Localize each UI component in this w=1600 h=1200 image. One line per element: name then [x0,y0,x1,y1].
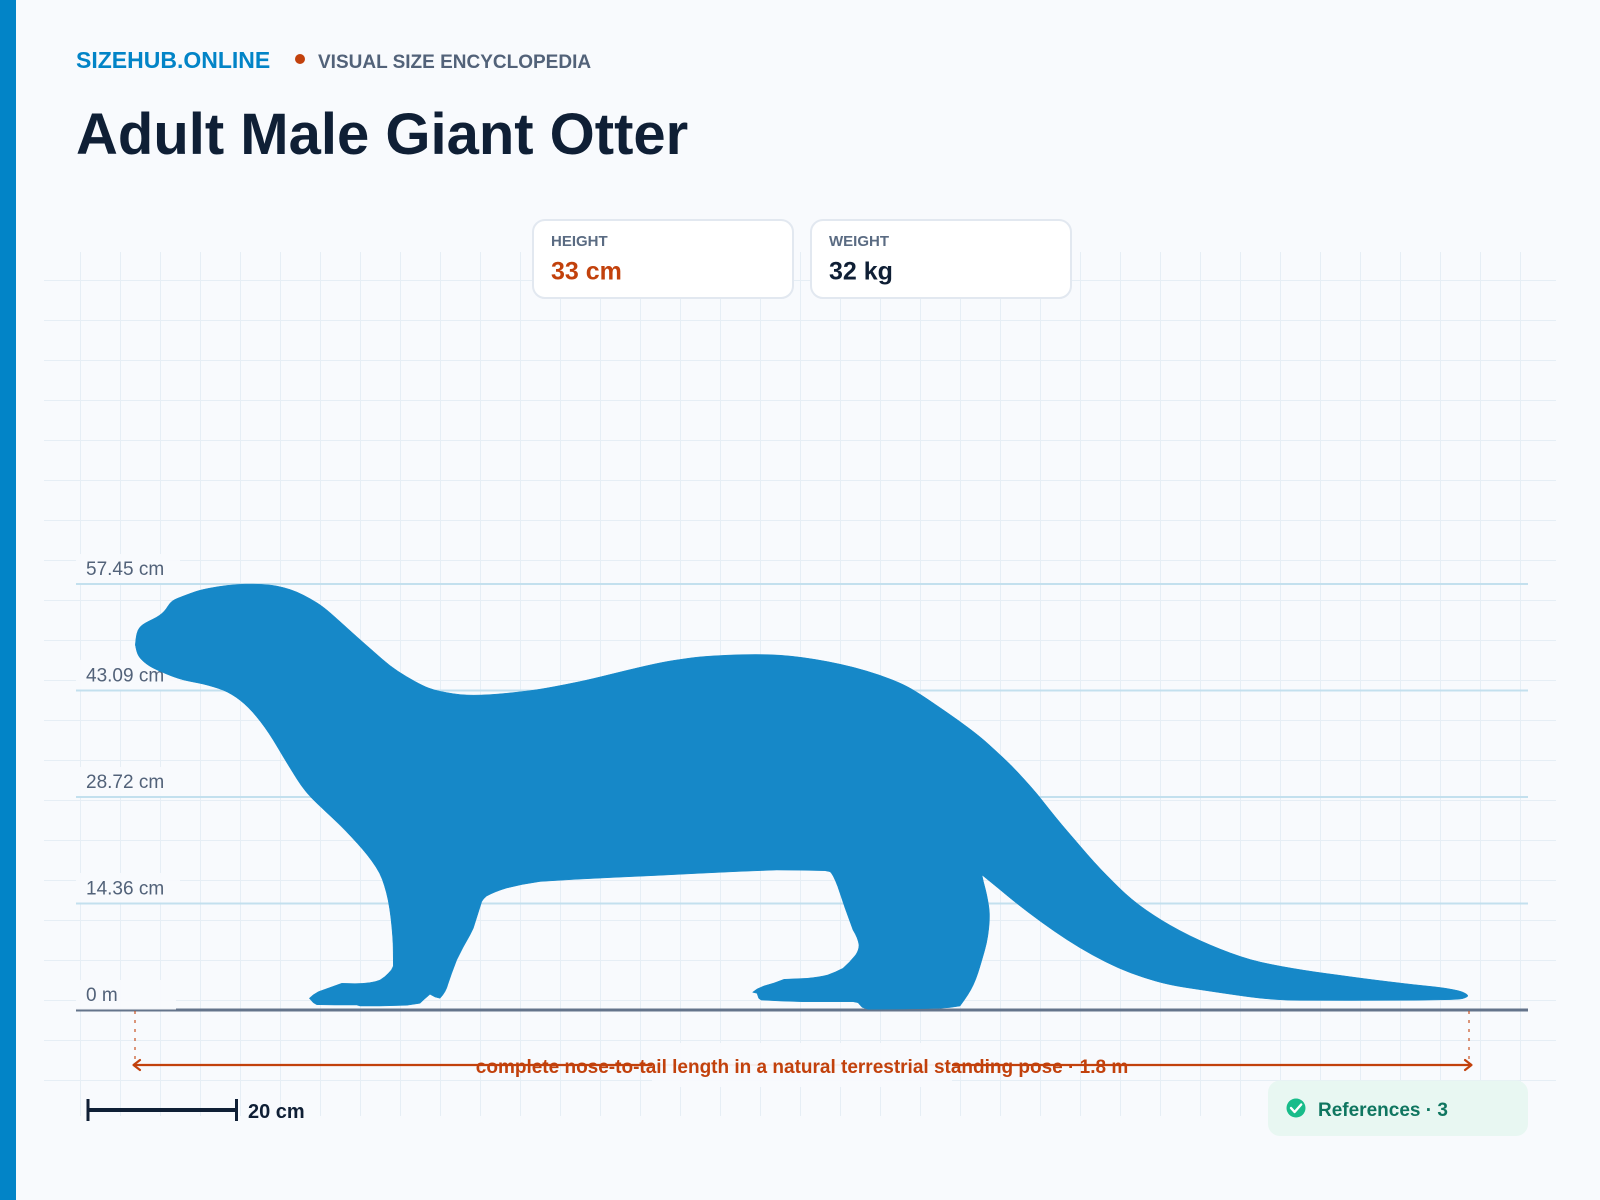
stat card: height: HEIGHT [551,233,608,250]
stat card: height [533,220,793,298]
stat card: weight: 32 kg [829,258,893,286]
scale bar: 20 cm [248,1101,305,1123]
header tagline: VISUAL SIZE ENCYCLOPEDIA [318,52,591,73]
left accent bar [0,0,16,1200]
length arrow [134,1060,1472,1070]
height axis labels: 0 m [86,985,118,1006]
height reference lines [76,583,1528,904]
references badge [1268,1080,1528,1136]
length caption [476,1043,1128,1087]
references badge: References · 3 [1318,1100,1448,1121]
height axis labels [76,554,180,1010]
scale bar [86,1099,305,1123]
stat card: weight: WEIGHT [829,233,889,250]
height axis labels: 28.72 cm [86,772,164,793]
background grid [44,252,1556,1116]
length caption: complete nose-to-tail length in a natural terrestrial standing pose · 1.8 m [476,1057,1128,1078]
header dot [295,54,305,64]
title: Adult Male Giant Otter [76,102,688,167]
height axis labels: 43.09 cm [86,666,164,686]
length extent guides [135,1011,1469,1060]
ground line [76,1008,1528,1012]
stat card: height: 33 cm [551,258,622,286]
stat card: weight [811,220,1071,298]
giant otter silhouette [135,584,1468,1009]
header brand: SIZEHUB.ONLINE [76,47,270,73]
height axis labels: 14.36 cm [86,878,164,900]
height axis labels: 57.45 cm [86,559,164,580]
